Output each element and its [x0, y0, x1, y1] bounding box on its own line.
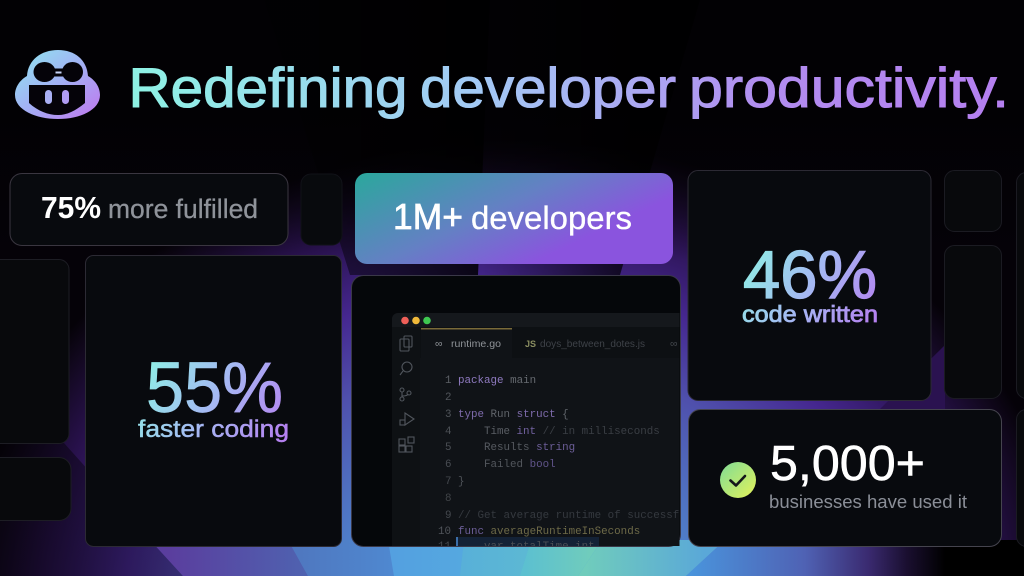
sidebar icons — [399, 336, 414, 452]
decorative tile: right middle — [944, 246, 1002, 398]
panel: 55% faster coding: faster coding — [138, 416, 289, 443]
decorative tile: far right — [1016, 172, 1024, 398]
code lines: 3 — [445, 409, 452, 421]
file tabs — [436, 340, 677, 350]
panel: 75% more fulfilled: more fulfilled — [108, 194, 258, 224]
panel: 46% code written: code written — [742, 301, 878, 327]
code lines: } — [458, 476, 465, 488]
panel: 55% faster coding — [86, 256, 342, 546]
panel: 46% code written — [688, 170, 931, 400]
file tabs: doys_between_dotes.js — [540, 338, 645, 350]
file tabs: runtime.go — [451, 338, 501, 350]
code lines: Time int // in milliseconds — [484, 426, 660, 438]
file tabs: ∞ — [670, 338, 678, 350]
code lines: // Get average runtime of successful runs — [458, 510, 725, 522]
panel: 75% more fulfilled — [10, 174, 288, 246]
editor window — [392, 313, 680, 546]
title: productivity. — [689, 56, 1009, 119]
panel: 1M+ developers: developers — [471, 200, 632, 236]
title: Redefining — [128, 56, 408, 119]
code lines: Results string — [484, 442, 575, 454]
decorative tile: left lower — [0, 458, 71, 520]
code lines: var totalTime int — [484, 541, 595, 553]
panel: 5,000+ businesses: businesses have used it — [769, 492, 967, 512]
code lines: 4 — [445, 426, 452, 438]
code lines: Failed bool — [484, 459, 556, 471]
panel: 46% code written: 46% — [743, 237, 877, 313]
panel: 1M+ developers — [355, 173, 673, 264]
decorative tile: small top — [301, 174, 342, 245]
code lines: 7 — [445, 476, 452, 488]
decorative tile: right top — [944, 170, 1002, 232]
code lines: 6 — [445, 459, 452, 471]
code lines: 2 — [445, 392, 452, 404]
code lines — [438, 375, 678, 546]
code lines: 1 — [445, 375, 452, 387]
title: developer — [420, 56, 676, 119]
panel: 75% more fulfilled: 75% — [41, 191, 101, 225]
decorative tile: left middle — [0, 260, 69, 444]
decorative tile: far right lower — [1016, 410, 1024, 546]
code lines: 10 — [438, 526, 451, 538]
panel: 55% faster coding: 55% — [146, 349, 283, 428]
code lines: type Run struct { — [458, 409, 569, 421]
panel: 1M+ developers: 1M+ — [393, 196, 463, 237]
code lines: 8 — [445, 493, 452, 505]
file tabs: JS — [525, 339, 536, 349]
code lines: 11 — [438, 541, 451, 553]
panel: code editor — [351, 275, 681, 547]
icon: check badge — [720, 462, 756, 498]
file tabs: ∞ — [435, 338, 442, 350]
panel: 5,000+ businesses — [688, 410, 1002, 546]
window buttons — [401, 317, 431, 324]
panel: 5,000+ businesses: 5,000+ — [770, 437, 925, 491]
code lines: func averageRuntimeInSeconds — [458, 526, 640, 538]
title — [128, 56, 1009, 119]
logo icon — [15, 50, 100, 119]
code lines: package main — [458, 375, 536, 387]
code lines: 5 — [445, 442, 452, 454]
code lines: 9 — [445, 510, 452, 522]
